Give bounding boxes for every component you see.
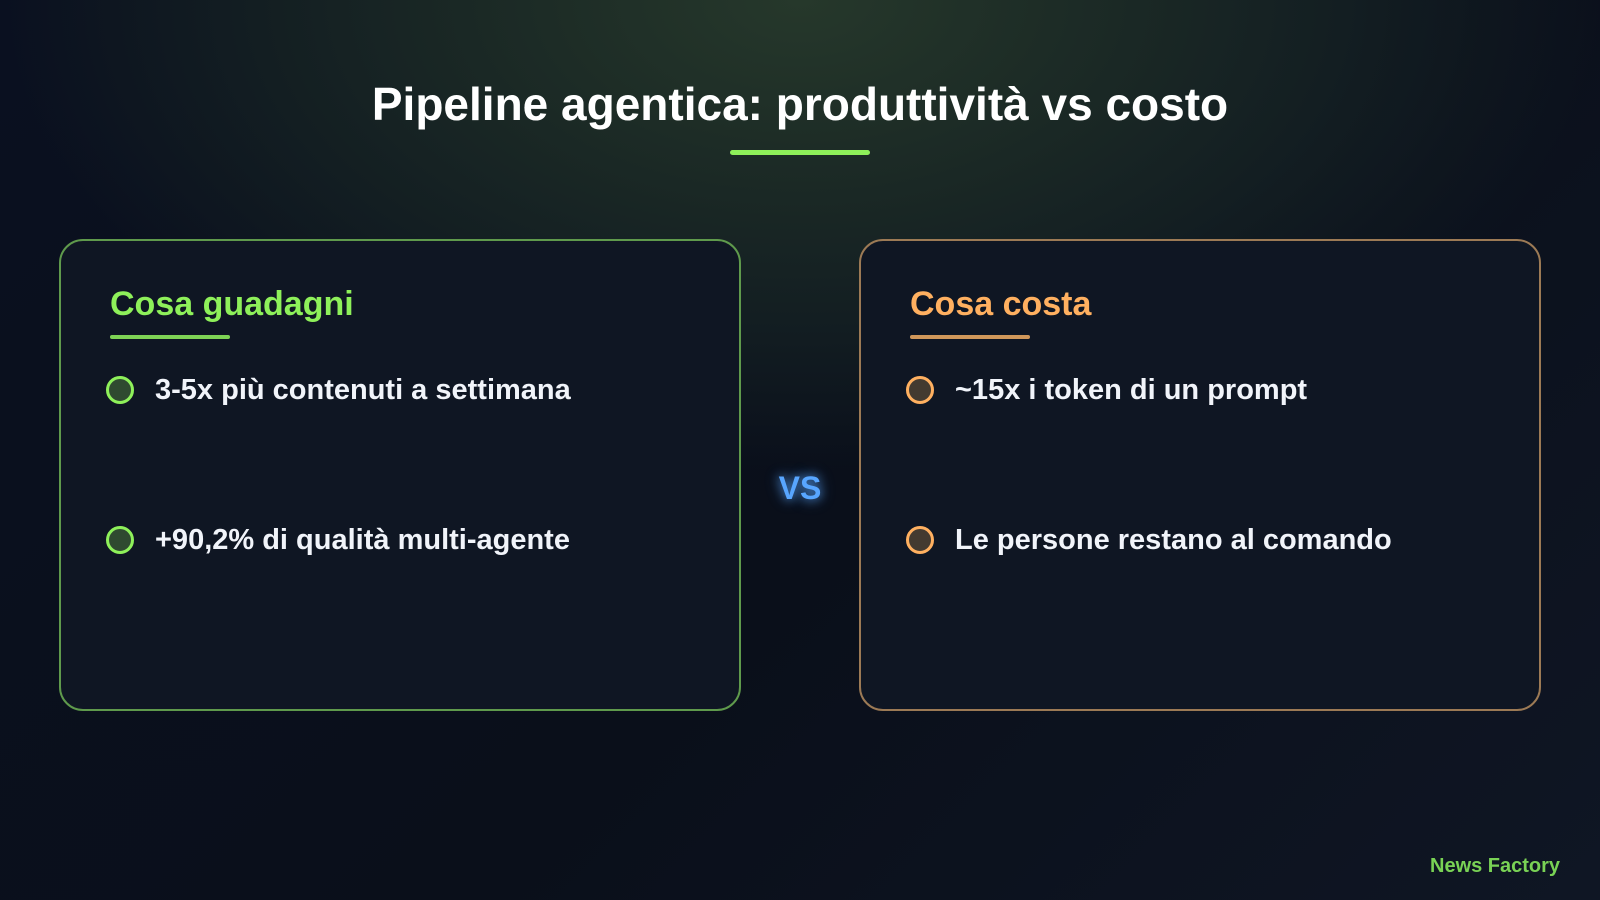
panel heading: cosa guadagni: Cosa guadagni (110, 284, 354, 322)
icon: orange bullet 1 (906, 376, 934, 404)
text: gain 2: +90,2% di qualità multi-agente (155, 524, 570, 556)
footer brand: News Factory (1430, 855, 1560, 877)
heading underline: gains (110, 335, 230, 339)
title underline (730, 150, 870, 155)
text: cost 1: ~15x i token di un prompt (955, 374, 1307, 406)
icon: orange bullet 2 (906, 526, 934, 554)
title: Pipeline agentica: produttività vs costo (372, 78, 1228, 130)
text: cost 2: Le persone restano al comando (955, 524, 1392, 556)
panel heading: cosa costa: Cosa costa (910, 284, 1091, 322)
icon: green bullet 1 (106, 376, 134, 404)
text: gain 1: 3-5x più contenuti a settimana (155, 374, 571, 406)
heading underline: costs (910, 335, 1030, 339)
icon: green bullet 2 (106, 526, 134, 554)
vs label: VS (779, 470, 821, 506)
panel: cosa costa (859, 239, 1541, 711)
panel: cosa guadagni (59, 239, 741, 711)
